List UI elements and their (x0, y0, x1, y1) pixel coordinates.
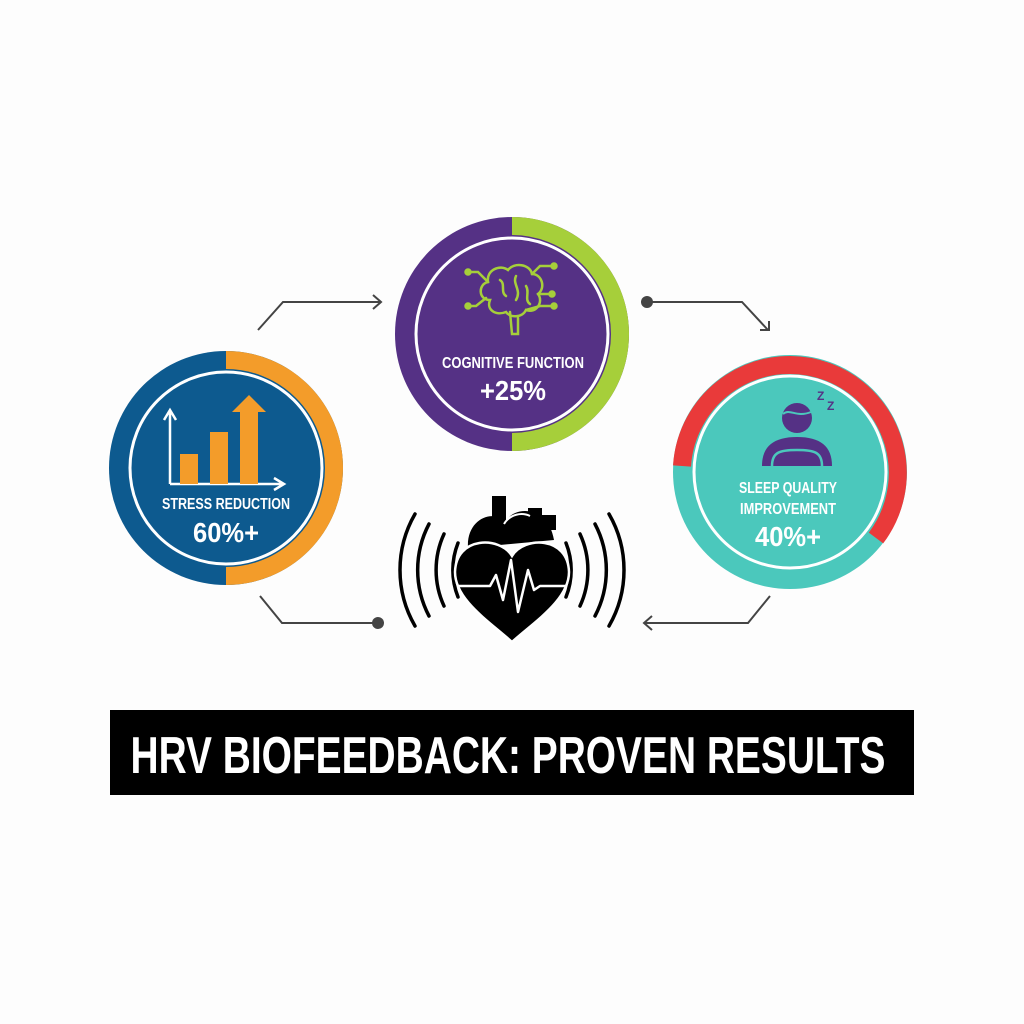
text: stress label: STRESS REDUCTION (162, 496, 290, 513)
arrow: top to right (641, 296, 769, 330)
arrow: right to heart (644, 596, 770, 630)
panel: cognitive function (395, 217, 629, 451)
upper atria (468, 511, 554, 548)
arrow: heart to left (260, 596, 384, 629)
icon: brain (466, 264, 556, 334)
text: sleep value: 40%+ (755, 521, 821, 552)
icon: sleeping person: Z (817, 389, 824, 403)
panel: stress reduction (109, 351, 343, 585)
icon: bar chart (164, 395, 284, 490)
vessels (492, 496, 506, 532)
text: stress value: 60%+ (193, 517, 259, 548)
title bar (110, 710, 914, 795)
panel: sleep quality: IMPROVEMENT (740, 501, 836, 518)
arrow: left to top (258, 295, 381, 330)
text: sleep label: SLEEP QUALITY (739, 480, 837, 497)
text: cognitive value: +25% (480, 375, 546, 406)
text: cognitive label: COGNITIVE FUNCTION (442, 355, 584, 372)
panel: sleep quality (673, 355, 907, 589)
icon: sleeping person: Z (827, 399, 834, 413)
icon: sleeping person (762, 389, 834, 466)
heart body (455, 543, 569, 642)
icon: heart with waves (400, 496, 624, 642)
